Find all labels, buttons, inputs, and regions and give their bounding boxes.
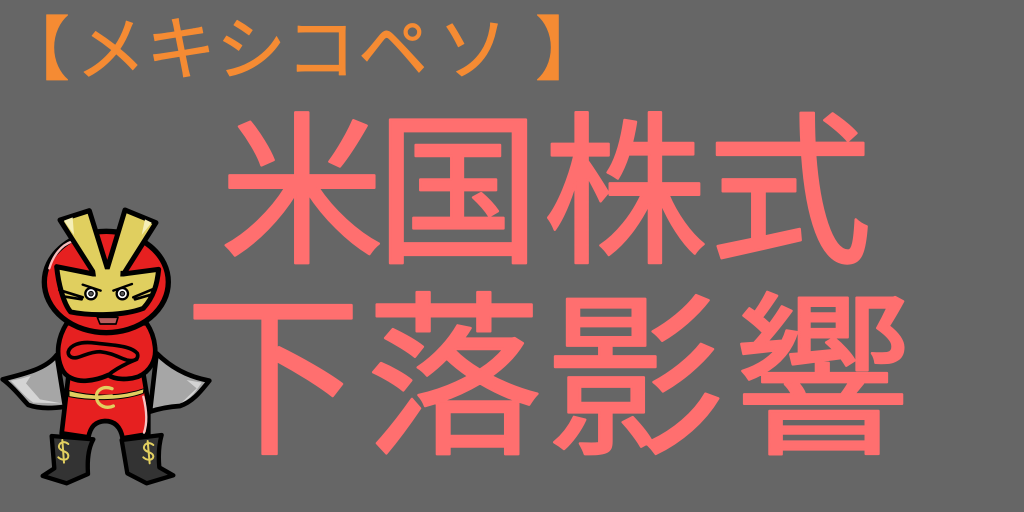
mascot right boot <box>122 435 173 483</box>
mascot belt <box>69 389 144 400</box>
heading: line two: 落 <box>366 236 542 491</box>
mascot head <box>44 210 168 333</box>
dollar sign left <box>58 440 68 463</box>
mascot eyes <box>59 284 155 299</box>
mascot belt buckle <box>96 388 113 407</box>
mascot body <box>58 323 155 438</box>
heading: line one: 米 <box>220 61 384 298</box>
mascot cape <box>3 353 209 412</box>
heading: line two: 響 <box>735 236 911 491</box>
mascot yen horns <box>60 210 156 273</box>
heading: line two: 影 <box>547 236 723 491</box>
mascot horn highlights <box>64 217 152 235</box>
mascot mouth <box>97 317 118 324</box>
heading: line two: 下 <box>185 236 361 491</box>
icon: mascot hero <box>3 210 209 483</box>
heading: line one: 式 <box>708 61 872 298</box>
mascot left boot <box>43 436 93 483</box>
dollar sign right <box>143 441 153 463</box>
mascot arms <box>58 323 155 381</box>
mascot face mask <box>57 267 159 315</box>
heading: line one: 国 <box>376 61 540 298</box>
heading: line one: 株 <box>543 61 707 298</box>
